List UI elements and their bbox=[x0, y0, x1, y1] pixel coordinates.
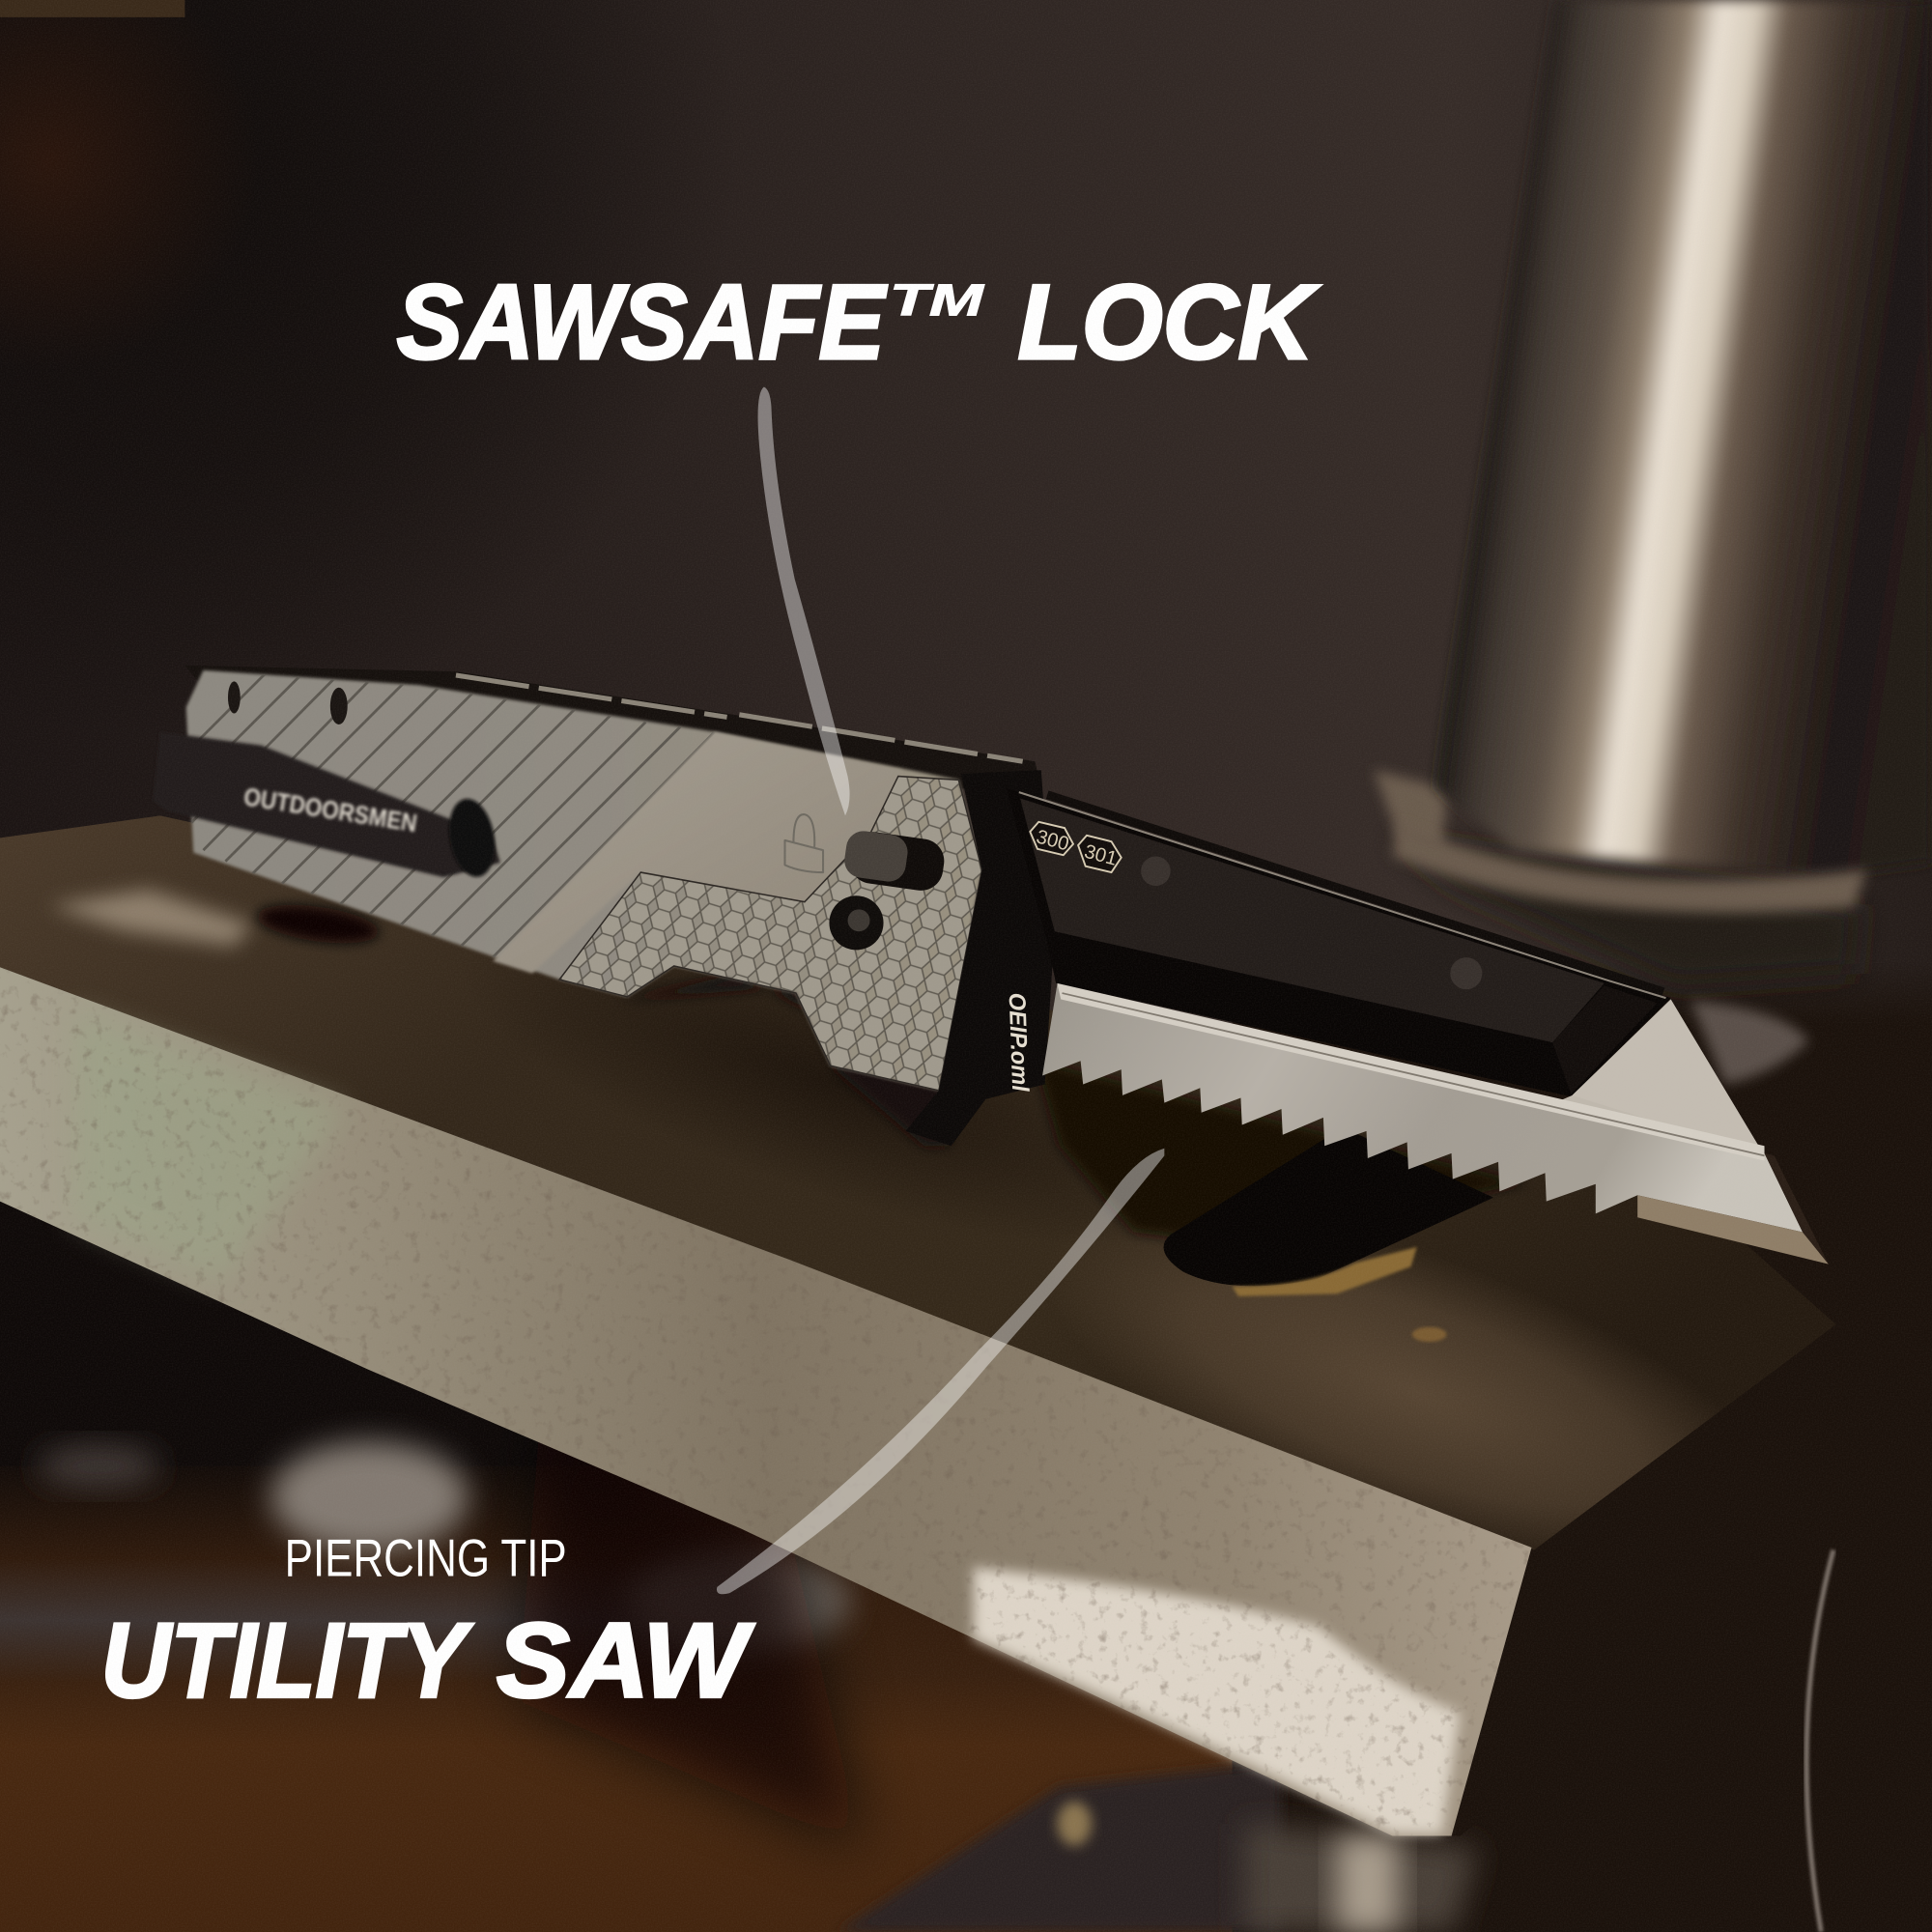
lower bevel bbox=[1637, 1195, 1829, 1264]
black tanto blade bbox=[1007, 788, 1671, 1096]
handle screw bbox=[829, 895, 884, 950]
heading: SawSafe Lock: TM bbox=[890, 275, 985, 326]
floor under the table bbox=[0, 1182, 1233, 1932]
diagonal grooves bbox=[187, 672, 715, 958]
bright light patch bbox=[974, 1567, 1460, 1833]
bright tip triangle bbox=[1555, 999, 1765, 1155]
saw blade bbox=[1042, 983, 1829, 1264]
clip logo text: OUTDOORSMEN bbox=[242, 783, 419, 838]
knife bbox=[153, 666, 1829, 1264]
pivot screws on handle bbox=[228, 681, 348, 724]
heading: utility saw bbox=[101, 1602, 755, 1719]
steel table bbox=[0, 815, 1861, 1848]
heading: SawSafe Lock bbox=[397, 264, 1320, 382]
lower right shadow area bbox=[1233, 961, 1932, 1932]
table side face bbox=[1435, 1337, 1861, 1836]
handle top spine bbox=[185, 666, 1041, 788]
leader line: utility saw bbox=[717, 1149, 1164, 1594]
steel grade badges: 301 bbox=[1082, 841, 1120, 870]
hexagon grip texture bbox=[559, 777, 982, 1091]
heading: utility saw: SAW bbox=[497, 1602, 755, 1719]
table top surface bbox=[0, 815, 1836, 1550]
bolster text: OEIP.oml bbox=[1004, 992, 1033, 1093]
serrated saw face bbox=[1042, 984, 1803, 1233]
heading: SawSafe Lock: SAWSAFE bbox=[397, 264, 887, 382]
gray handle scale bbox=[186, 670, 982, 1091]
metal column bbox=[1374, 0, 1932, 985]
belt clip bbox=[153, 732, 500, 881]
steel grade badges bbox=[1030, 822, 1122, 872]
front face pitting bbox=[0, 961, 1540, 1848]
flat lock panel bbox=[493, 732, 902, 974]
handle shadow bbox=[254, 898, 382, 950]
leader line: SawSafe lock bbox=[758, 387, 850, 815]
subheading: piercing tip: PIERCING TIP bbox=[285, 1527, 567, 1587]
heading: utility saw: UTILITY bbox=[101, 1602, 473, 1719]
black bolster with text bbox=[906, 770, 1054, 1146]
table front face bbox=[0, 967, 1531, 1836]
blade rail highlight bbox=[1057, 983, 1765, 1161]
shadow beneath the teeth bbox=[1035, 1060, 1528, 1244]
slot in table bbox=[1164, 1127, 1493, 1286]
heading: SawSafe Lock: LOCK bbox=[1018, 264, 1320, 382]
steel grade badges: 300 bbox=[1034, 826, 1071, 856]
lock slider bbox=[842, 829, 947, 894]
lock icon bbox=[784, 814, 823, 872]
bottom metal shapes bbox=[838, 1550, 1833, 1932]
